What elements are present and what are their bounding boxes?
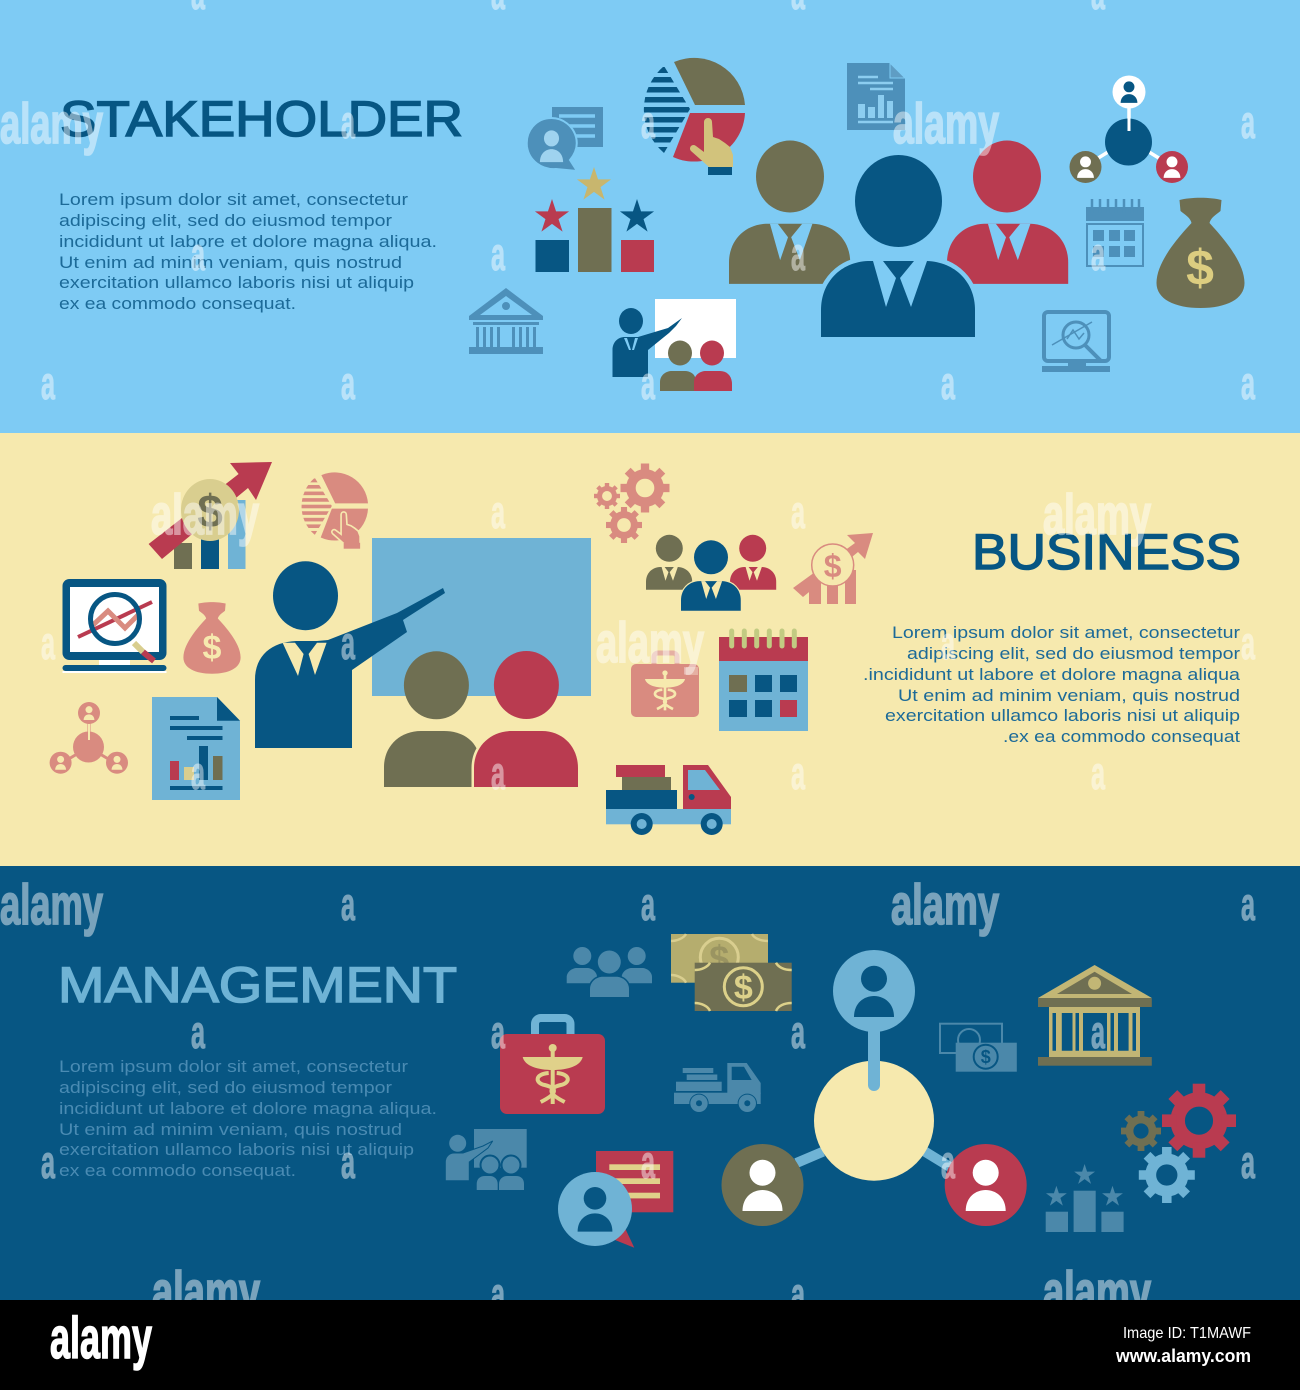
icon: money bag: $	[1186, 240, 1214, 296]
watermarks: alamy	[596, 611, 704, 675]
icon: delivery truck, muted	[674, 1063, 761, 1112]
icon: monitor with magnifier, colour	[62, 579, 166, 673]
watermarks: alamy	[0, 873, 103, 937]
watermarks: a	[1091, 747, 1105, 799]
icon: banknotes, colour: $	[709, 938, 729, 979]
icon: growth chart, pink	[793, 533, 873, 604]
footer bar	[0, 1300, 1300, 1390]
text block: management lorem ipsum: ex ea commodo consequat.	[59, 1161, 296, 1180]
text block: business lorem ipsum: exercitation ullamco laboris nisi ut aliquip	[885, 706, 1240, 725]
watermarks: a	[791, 747, 805, 799]
watermarks: alamy	[151, 483, 259, 547]
footer logo: alamy	[50, 1306, 152, 1371]
watermarks: a	[641, 1136, 655, 1188]
watermarks: a	[641, 357, 655, 409]
text block: business lorem ipsum: .ex ea commodo consequat	[1003, 727, 1240, 746]
icon: delivery truck, colour	[606, 765, 731, 835]
watermarks: a	[341, 617, 355, 669]
icon: three suited people	[729, 140, 1068, 337]
website: www.alamy.com	[1115, 1346, 1251, 1366]
watermarks: a	[791, 1006, 805, 1058]
icon: chat with person, colour	[558, 1151, 673, 1248]
watermarks: a	[491, 747, 505, 799]
text block: stakeholder lorem ipsum: adipiscing elit, sed do eiusmod tempor	[59, 211, 392, 230]
icon: monitor with magnifier	[1042, 312, 1110, 372]
icon: presenter with audience	[612, 299, 736, 391]
panel: management	[0, 866, 1300, 1300]
watermarks: a	[341, 96, 355, 148]
icon: banknotes, colour	[671, 934, 792, 1011]
heading: management: MANAGEMENT	[58, 956, 457, 1013]
text block: management lorem ipsum: Lorem ipsum dolor sit amet, consectetur	[59, 1057, 408, 1076]
watermarks: a	[491, 228, 505, 280]
watermarks: a	[1241, 617, 1255, 669]
icon: growth chart with coin: $	[197, 485, 223, 537]
watermarks: a	[191, 1006, 205, 1058]
text block: business lorem ipsum: Lorem ipsum dolor sit amet, consectetur	[892, 623, 1240, 642]
watermarks: a	[41, 1136, 55, 1188]
icon: calendar, colour	[719, 631, 808, 731]
watermarks: a	[941, 617, 955, 669]
icon: document with chart, colour	[152, 697, 240, 800]
image id: Image ID: T1MAWF	[1123, 1325, 1251, 1342]
watermarks: a	[941, 357, 955, 409]
icon: banknotes, colour: $	[734, 969, 753, 1007]
watermarks: a	[491, 486, 505, 538]
icon: medical case, pink	[631, 653, 699, 717]
watermarks: alamy	[1043, 1260, 1151, 1324]
icon: money bag	[1156, 198, 1244, 308]
text block: stakeholder lorem ipsum: ex ea commodo consequat.	[59, 294, 296, 313]
watermarks: a	[1241, 1136, 1255, 1188]
icon: document with chart	[847, 63, 905, 130]
watermarks: a	[341, 878, 355, 930]
text block: management lorem ipsum: incididunt ut labore et dolore magna aliqua.	[59, 1099, 437, 1118]
text block: management lorem ipsum: Ut enim ad minim veniam, quis nostrud	[59, 1120, 402, 1139]
text block: stakeholder lorem ipsum: incididunt ut labore et dolore magna aliqua.	[59, 232, 437, 251]
icon: team of three	[646, 535, 776, 611]
watermarks: a	[341, 357, 355, 409]
watermarks: a	[1091, 228, 1105, 280]
icon: money bag, pink	[183, 602, 241, 674]
illustration: presenter with board and audience	[255, 538, 591, 792]
icon: team, muted	[567, 947, 652, 997]
watermarks: alamy	[891, 873, 999, 937]
panel: stakeholder	[0, 0, 1300, 433]
text block: management lorem ipsum: adipiscing elit, sed do eiusmod tempor	[59, 1078, 392, 1097]
icon: calendar top	[1086, 199, 1144, 267]
panel: business	[0, 433, 1300, 866]
watermarks: a	[791, 228, 805, 280]
text block: business lorem ipsum: adipiscing elit, sed do eiusmod tempor	[907, 644, 1240, 663]
watermarks: a	[41, 357, 55, 409]
watermarks: a	[41, 617, 55, 669]
watermarks: alamy	[0, 92, 103, 156]
watermarks: a	[341, 1136, 355, 1188]
icon: gears, pink	[594, 464, 670, 543]
text block: stakeholder lorem ipsum	[59, 190, 437, 313]
text block: management lorem ipsum: exercitation ullamco laboris nisi ut aliquip	[59, 1140, 414, 1159]
icon: network top	[1070, 76, 1188, 183]
heading: stakeholder: STAKEHOLDER	[60, 90, 463, 147]
watermarks: a	[1241, 96, 1255, 148]
heading: business: BUSINESS	[972, 523, 1241, 580]
text block: stakeholder lorem ipsum: Lorem ipsum dolor sit amet, consectetur	[59, 190, 408, 209]
icon: banknotes, muted	[940, 1024, 1017, 1072]
icon: podium with stars	[535, 167, 654, 272]
watermarks: a	[191, 228, 205, 280]
text block: management lorem ipsum	[59, 1057, 437, 1180]
watermarks: a	[641, 878, 655, 930]
watermarks: a	[641, 96, 655, 148]
icon: medical case, colour	[500, 1018, 605, 1114]
icon: growth chart, pink: $	[824, 548, 842, 584]
icon: banknotes, muted: $	[981, 1047, 991, 1067]
text block: stakeholder lorem ipsum: Ut enim ad minim veniam, quis nostrud	[59, 253, 402, 272]
text block: business lorem ipsum	[863, 623, 1241, 746]
watermarks: a	[491, 1268, 505, 1320]
icon: growth chart with coin	[149, 462, 272, 569]
watermarks: alamy	[893, 92, 999, 156]
watermarks: alamy	[152, 1260, 260, 1324]
watermarks: a	[1091, 1006, 1105, 1058]
icon: chat with person	[527, 107, 603, 171]
icon: bank, colour	[1038, 965, 1152, 1066]
watermarks: a	[791, 486, 805, 538]
watermarks: a	[1241, 878, 1255, 930]
watermarks: a	[941, 1136, 955, 1188]
watermarks: a	[1241, 357, 1255, 409]
watermarks: alamy	[1043, 483, 1151, 547]
icon: network, large	[722, 950, 1027, 1226]
text block: stakeholder lorem ipsum: exercitation ullamco laboris nisi ut aliquip	[59, 273, 414, 292]
icon: network, pink	[50, 702, 128, 774]
watermarks: a	[191, 747, 205, 799]
icon: podium, muted	[1046, 1164, 1124, 1232]
text block: business lorem ipsum: .incididunt ut labore et dolore magna aliqua	[863, 665, 1241, 684]
watermarks: a	[491, 1006, 505, 1058]
icon: money bag, pink: $	[203, 629, 222, 667]
watermarks: a	[791, 1268, 805, 1320]
icon: gears, colour	[1121, 1084, 1236, 1203]
icon: presenter, muted	[445, 1129, 527, 1190]
icon: pie chart with hand, pink	[299, 472, 368, 549]
icon: bank	[469, 288, 543, 354]
icon: pie chart with hand	[640, 58, 745, 175]
text block: business lorem ipsum: Ut enim ad minim veniam, quis nostrud	[898, 686, 1240, 705]
